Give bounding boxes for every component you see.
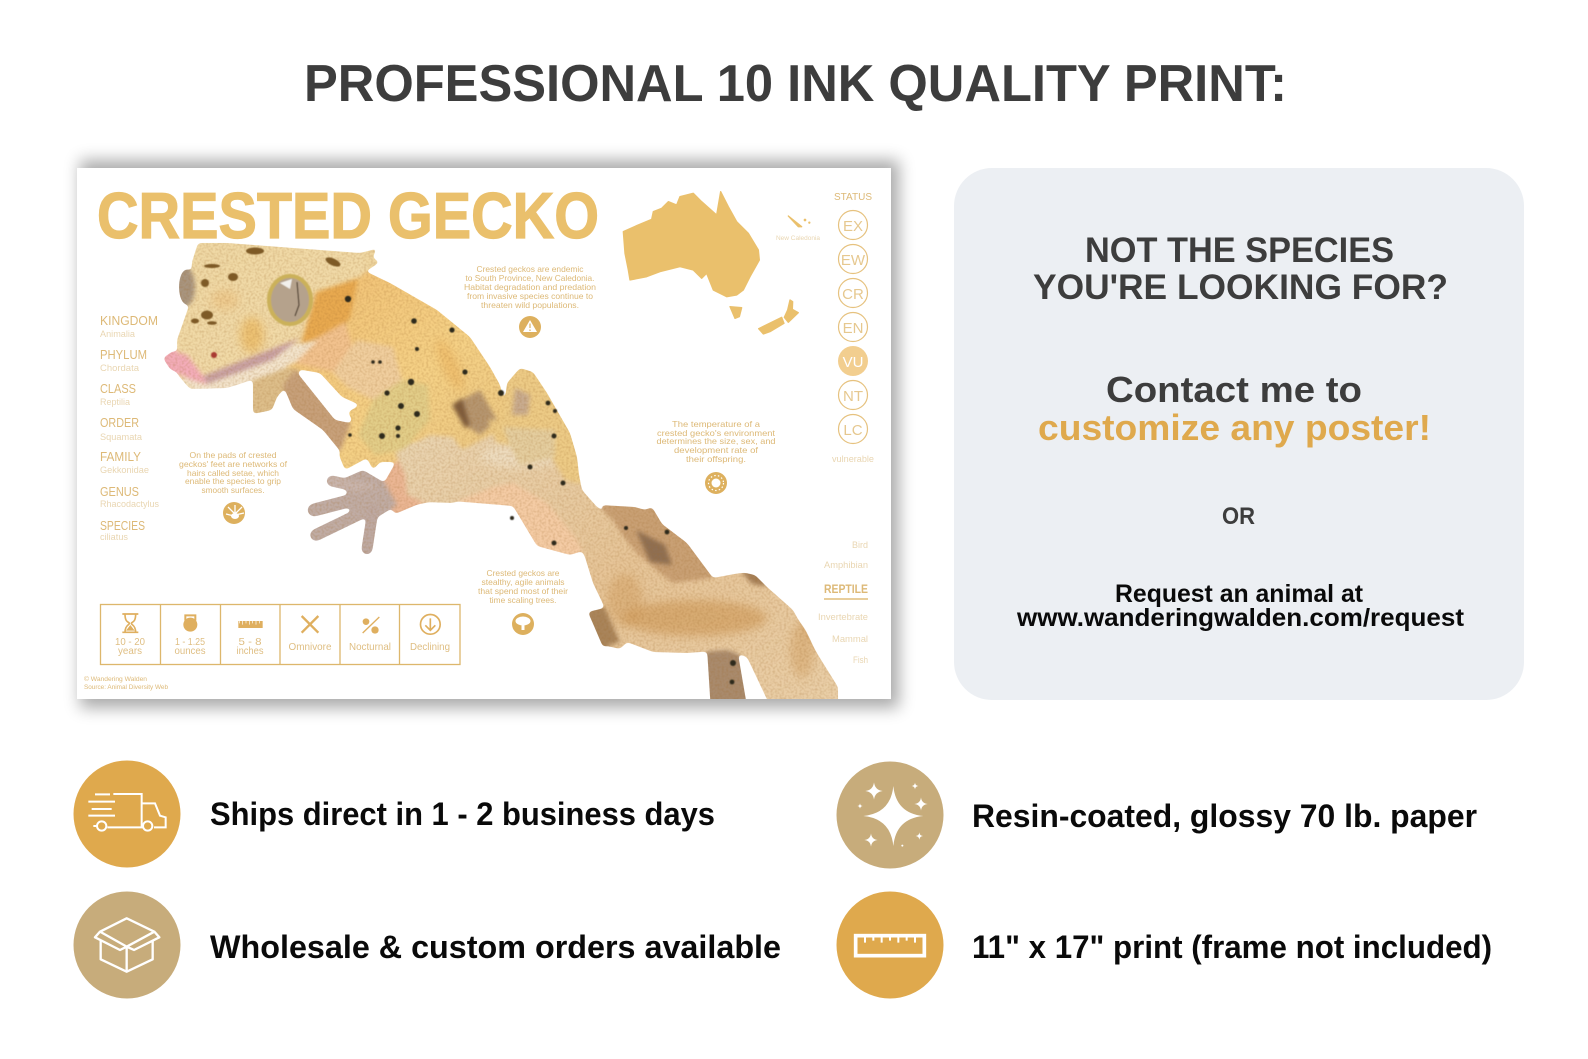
mouth <box>203 338 300 384</box>
front foot palm <box>345 470 397 520</box>
animal class list: Fish <box>853 655 868 666</box>
stealth fact text: time scaling trees. <box>490 595 556 605</box>
icon: ruler <box>856 936 924 956</box>
taxonomy list: ORDER <box>100 415 139 430</box>
conservation status scale: VU <box>843 354 863 371</box>
stat labels: ounces <box>174 645 206 657</box>
stat labels: Omnivore <box>288 641 332 653</box>
panel heading: NOT THE SPECIES <box>1085 231 1394 270</box>
or divider: OR <box>1222 503 1255 530</box>
stealth fact text: that spend most of their <box>478 586 568 596</box>
request link <box>1016 580 1465 632</box>
taxonomy list: CLASS <box>100 381 136 396</box>
taxonomy list <box>100 313 159 543</box>
panel heading <box>1033 231 1448 307</box>
conservation status scale: EW <box>841 252 866 269</box>
request link: www.wanderingwalden.com/request <box>1016 604 1465 632</box>
feature: size <box>836 892 1492 998</box>
endemic fact text: threaten wild populations. <box>481 300 579 310</box>
back foot <box>488 368 580 484</box>
setae fact text <box>179 450 288 495</box>
feature text: Wholesale & custom orders available <box>210 929 781 965</box>
icon: truck <box>88 794 166 831</box>
neck orange <box>300 278 358 347</box>
conservation status scale: EX <box>843 218 863 235</box>
contact callout <box>1038 369 1431 448</box>
icon: sun <box>705 472 727 494</box>
taxonomy list: Rhacodactylus <box>100 499 159 510</box>
animal class list <box>818 540 868 666</box>
stealth fact text: stealthy, agile animals <box>482 577 564 587</box>
head <box>177 243 374 389</box>
conservation status scale: vulnerable <box>832 454 874 464</box>
limbs behind branch <box>707 648 748 712</box>
endemic fact text <box>464 264 596 310</box>
poster credits <box>84 676 169 691</box>
toes <box>332 481 372 490</box>
stat labels: 1 - 1.25 <box>175 636 205 648</box>
taxonomy list: SPECIES <box>100 518 145 533</box>
brown stub <box>461 389 498 436</box>
conservation status scale: STATUS <box>834 191 872 203</box>
stat labels: inches <box>236 645 264 657</box>
taxonomy list: Gekkonidae <box>100 465 149 476</box>
icon: box <box>95 918 159 972</box>
taxonomy list: PHYLUM <box>100 347 147 362</box>
tongue <box>163 351 207 384</box>
taxonomy list: Reptilia <box>100 397 131 408</box>
setae fact text: smooth surfaces. <box>202 485 264 495</box>
temperature fact text: determines the size, sex, and <box>656 436 776 446</box>
feature text: Ships direct in 1 - 2 business days <box>210 796 715 832</box>
endemic fact text: to South Province, New Caledonia. <box>466 273 594 283</box>
animal class list: Mammal <box>832 634 868 645</box>
setae fact text: enable the species to grip <box>185 476 281 486</box>
panel: custom request <box>954 168 1524 700</box>
main branch <box>395 425 838 712</box>
conservation status scale: EN <box>843 320 863 337</box>
rear eye <box>179 269 195 305</box>
map: Australia and New Zealand <box>623 192 810 334</box>
page title: PROFESSIONAL 10 INK QUALITY PRINT: <box>304 55 1287 113</box>
temperature fact text <box>656 419 776 464</box>
contact callout: customize any poster! <box>1038 407 1431 448</box>
poster credits: Source: Animal Diversity Web <box>84 684 169 691</box>
setae fact text: hairs called setae, which <box>187 468 279 478</box>
stealth fact text <box>478 568 568 605</box>
feature: wholesale <box>74 892 781 998</box>
feature text: Resin-coated, glossy 70 lb. paper <box>972 798 1477 834</box>
stat icons <box>122 614 440 634</box>
conservation status scale: NT <box>843 388 863 405</box>
stat labels: 5 - 8 <box>238 636 262 648</box>
icon: warning <box>519 316 541 338</box>
taxonomy list: FAMILY <box>100 449 141 464</box>
contact callout: Contact me to <box>1106 369 1362 410</box>
temperature fact text: crested gecko's environment <box>657 428 776 438</box>
setae fact text: geckos' feet are networks of <box>179 459 288 469</box>
temperature fact text: development rate of <box>674 445 759 455</box>
stat labels: Declining <box>410 641 450 653</box>
animal class list: Invertebrate <box>818 612 868 623</box>
taxonomy list: KINGDOM <box>100 313 158 328</box>
temperature fact text: their offspring. <box>686 454 746 464</box>
feature text: 11" x 17" print (frame not included) <box>972 929 1492 965</box>
setae fact text: On the pads of crested <box>190 450 277 460</box>
map label: New Caledonia <box>776 235 820 242</box>
animal class list: REPTILE <box>824 582 868 596</box>
gecko illustration on branch <box>163 243 838 712</box>
poster credits: © Wandering Walden <box>84 676 148 683</box>
eye and spots <box>191 248 736 684</box>
taxonomy list: Animalia <box>100 329 136 340</box>
animal class list: Amphibian <box>824 560 868 571</box>
endemic fact text: Habitat degradation and predation <box>464 282 596 292</box>
back arm <box>281 370 352 455</box>
conservation status scale: LC <box>843 422 863 439</box>
poster title: CRESTED GECKO <box>97 179 599 252</box>
stat labels: Nocturnal <box>349 641 391 653</box>
belly <box>415 484 584 556</box>
conservation status scale: CR <box>842 286 864 303</box>
stats table <box>100 604 460 665</box>
icon: sparkles <box>857 782 928 847</box>
endemic fact text: from invasive species continue to <box>467 291 593 301</box>
feature: paper <box>836 762 1477 868</box>
stat labels: 10 - 20 <box>115 636 145 648</box>
poster drop shadow <box>80 160 899 708</box>
taxonomy list: ciliatus <box>100 532 128 543</box>
stat labels <box>115 636 450 657</box>
endemic fact text: Crested geckos are endemic <box>476 264 584 274</box>
head orange patches <box>240 317 264 353</box>
animal class list: Bird <box>852 540 868 551</box>
stealth fact text: Crested geckos are <box>486 568 560 578</box>
small back leg <box>253 366 300 414</box>
temperature fact text: The temperature of a <box>672 419 760 429</box>
front foot wrist <box>381 461 422 513</box>
taxonomy list: Squamata <box>100 432 143 443</box>
panel heading: YOU'RE LOOKING FOR? <box>1033 268 1448 307</box>
panel: poster <box>77 168 891 712</box>
feature: shipping <box>74 760 715 868</box>
taxonomy list: Chordata <box>100 363 140 374</box>
torso <box>285 272 520 470</box>
taxonomy list: GENUS <box>100 484 139 499</box>
icon: tree <box>512 613 534 635</box>
crest spines <box>367 250 378 274</box>
conservation status scale <box>832 191 874 464</box>
icon: gecko foot <box>223 502 245 524</box>
lower jaw <box>180 340 318 389</box>
request link: Request an animal at <box>1115 580 1364 608</box>
stat labels: years <box>118 645 142 657</box>
